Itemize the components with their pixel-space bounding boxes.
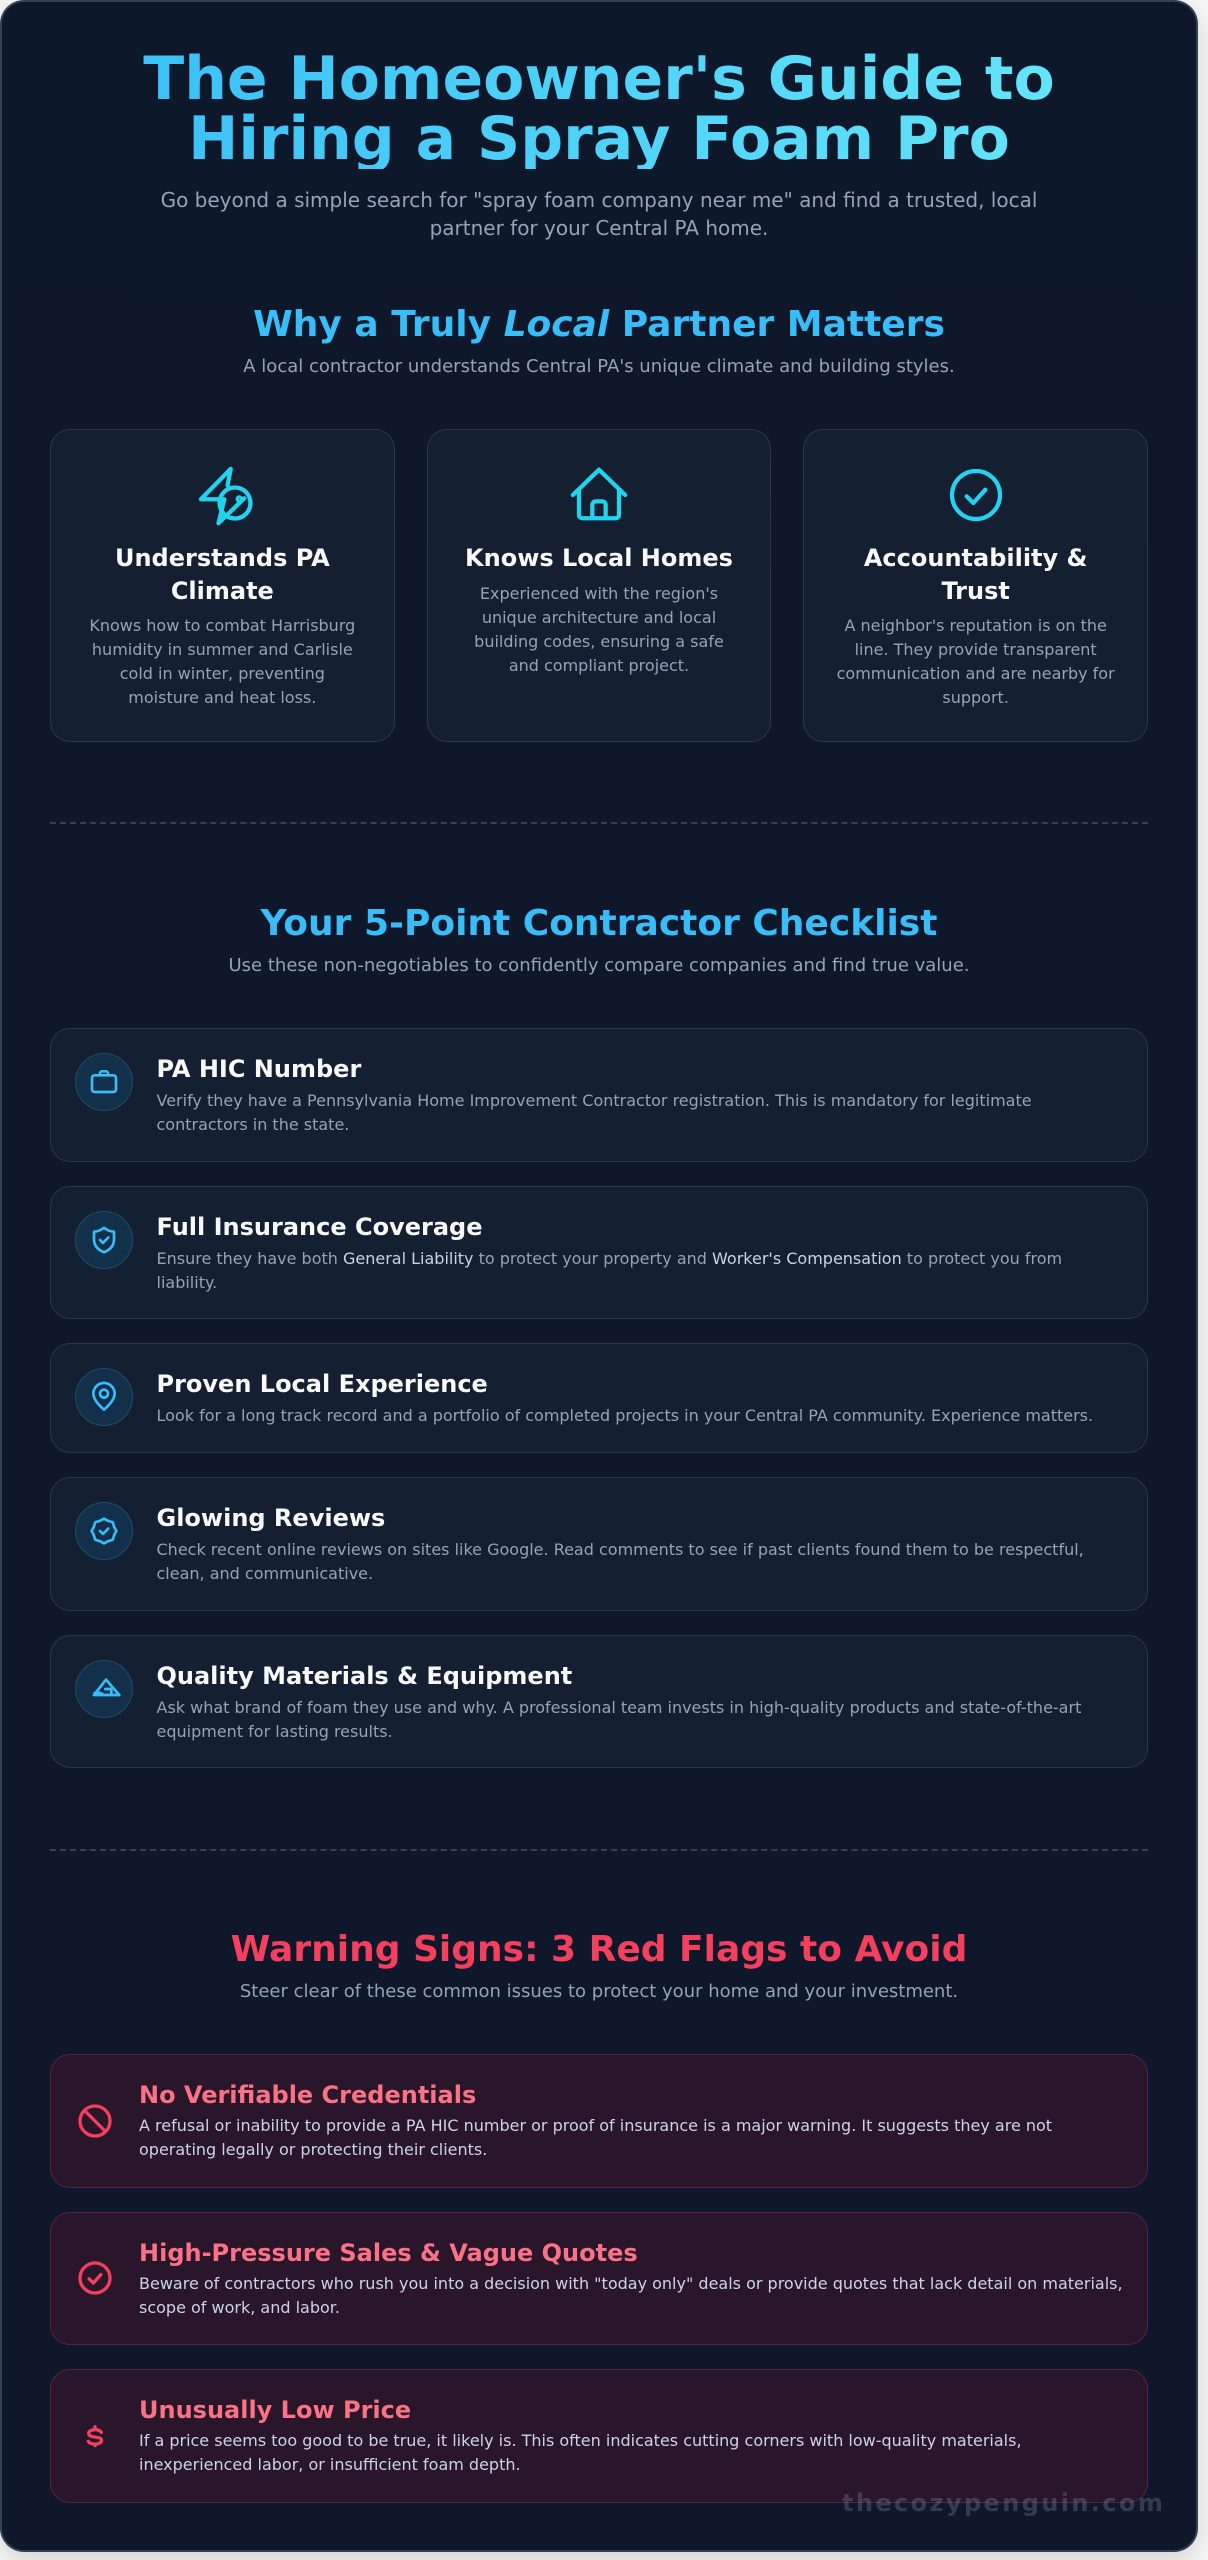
card text: unique architecture and local xyxy=(482,608,716,627)
card text: Experienced with the region's xyxy=(480,584,718,603)
card text xyxy=(837,616,1115,707)
heading: checklist: Your 5-Point Contractor Checklist xyxy=(261,903,937,944)
checklist item: full insurance xyxy=(50,1186,1148,1319)
warning text xyxy=(139,2116,1052,2159)
card text: moisture and heat loss. xyxy=(128,688,316,707)
card text: and compliant project. xyxy=(509,656,689,675)
warning card: high pressure xyxy=(50,2212,1148,2345)
warning heading: High-Pressure Sales & Vague Quotes xyxy=(139,2239,638,2267)
checklist item: local experience xyxy=(50,1343,1148,1453)
icon: badge check xyxy=(75,1502,133,1560)
panel: understands PA climate xyxy=(50,429,395,742)
item text xyxy=(156,1540,1084,1583)
card text: communication and are nearby for xyxy=(837,664,1115,683)
item text: liability. xyxy=(156,1273,217,1292)
icon: mountain xyxy=(75,1660,133,1718)
title: The Homeowner's Guide to xyxy=(143,44,1055,114)
checklist item: PA HIC number xyxy=(50,1028,1148,1162)
title: Hiring a Spray Foam Pro xyxy=(188,104,1010,174)
warning text: operating legally or protecting their clients. xyxy=(139,2140,487,2159)
subtitle xyxy=(161,188,1037,240)
subtitle: partner for your Central PA home. xyxy=(430,216,768,240)
warning text xyxy=(139,2431,1022,2474)
item text: Ask what brand of foam they use and why. A professional team invests in high-quality products and state-of-the-art xyxy=(156,1698,1081,1717)
card heading: Trust xyxy=(941,577,1010,605)
panel: knows local homes xyxy=(427,429,771,742)
card text: building codes, ensuring a safe xyxy=(474,632,724,651)
item heading: Full Insurance Coverage xyxy=(156,1213,482,1241)
icon: bolt with circle xyxy=(198,466,253,526)
warning text: A refusal or inability to provide a PA HIC number or proof of insurance is a major warning. It suggests they are not xyxy=(139,2116,1052,2135)
item text: Verify they have a Pennsylvania Home Improvement Contractor registration. This is mandatory for legitimate xyxy=(156,1091,1032,1110)
warning heading: Unusually Low Price xyxy=(139,2396,411,2424)
section intro: red flags: Steer clear of these common issues to protect your home and your investment. xyxy=(240,1981,958,2002)
item text: equipment for lasting results. xyxy=(156,1722,393,1741)
item heading: PA HIC Number xyxy=(156,1055,361,1083)
warning heading: No Verifiable Credentials xyxy=(139,2081,476,2109)
checklist item: reviews xyxy=(50,1477,1148,1611)
warning text: scope of work, and labor. xyxy=(139,2298,340,2317)
card heading: Accountability & xyxy=(864,544,1087,572)
card text: humidity in summer and Carlisle xyxy=(92,640,353,659)
subtitle: Go beyond a simple search for "spray foam company near me" and find a trusted, local xyxy=(161,188,1037,212)
item text: Ensure they have both General Liability to protect your property and Worker's Compensation to protect you from xyxy=(156,1249,1062,1268)
item text xyxy=(156,1091,1032,1134)
item text: clean, and communicative. xyxy=(156,1564,373,1583)
section intro: checklist: Use these non-negotiables to confidently compare companies and find true value. xyxy=(228,955,970,976)
card heading xyxy=(115,544,330,605)
item heading: Quality Materials & Equipment xyxy=(156,1662,572,1690)
card text: Knows how to combat Harrisburg xyxy=(89,616,355,635)
item text xyxy=(156,1698,1081,1741)
item text: Look for a long track record and a portfolio of completed projects in your Central PA community. Experience matters. xyxy=(156,1406,1093,1425)
icon: map pin xyxy=(75,1368,133,1426)
card heading: Understands PA xyxy=(115,544,330,572)
warning card: low price xyxy=(50,2369,1148,2503)
heading: red flags: Warning Signs: 3 Red Flags to Avoid xyxy=(231,1929,967,1970)
warning text: If a price seems too good to be true, it likely is. This often indicates cutting corners with low-quality materials, xyxy=(139,2431,1022,2450)
card heading: Climate xyxy=(171,577,274,605)
warning card: credentials xyxy=(50,2054,1148,2188)
card text: A neighbor's reputation is on the xyxy=(844,616,1107,635)
icon: check circle xyxy=(78,2261,112,2295)
card heading: Knows Local Homes xyxy=(465,544,733,572)
icon: shield check xyxy=(75,1211,133,1269)
card heading xyxy=(864,544,1087,605)
panel: accountability and trust xyxy=(803,429,1148,742)
item heading: Proven Local Experience xyxy=(156,1370,488,1398)
section intro: why local: A local contractor understands Central PA's unique climate and building styles. xyxy=(243,356,955,377)
icon: house xyxy=(570,467,628,520)
item text: Check recent online reviews on sites like Google. Read comments to see if past clients found them to be respectful, xyxy=(156,1540,1084,1559)
item text: contractors in the state. xyxy=(156,1115,349,1134)
checklist item: materials xyxy=(50,1635,1148,1768)
warning text: inexperienced labor, or insufficient foam depth. xyxy=(139,2455,521,2474)
heading: why local matters: Why a Truly Local Partner Matters xyxy=(253,304,945,345)
card text xyxy=(89,616,355,707)
card text: support. xyxy=(942,688,1009,707)
watermark: thecozypenguin.com xyxy=(842,2489,1165,2517)
title xyxy=(50,49,1148,169)
item heading: Glowing Reviews xyxy=(156,1504,385,1532)
warning text: Beware of contractors who rush you into a decision with "today only" deals or provide quotes that lack detail on materials, xyxy=(139,2274,1123,2293)
icon: ban xyxy=(78,2104,112,2138)
card text: line. They provide transparent xyxy=(855,640,1097,659)
icon: dollar sign xyxy=(86,2425,104,2448)
item text xyxy=(156,1249,1062,1292)
icon: check circle xyxy=(950,468,1002,522)
card text xyxy=(474,584,724,675)
warning text xyxy=(139,2274,1123,2317)
icon: briefcase xyxy=(75,1053,133,1111)
card text: cold in winter, preventing xyxy=(120,664,325,683)
